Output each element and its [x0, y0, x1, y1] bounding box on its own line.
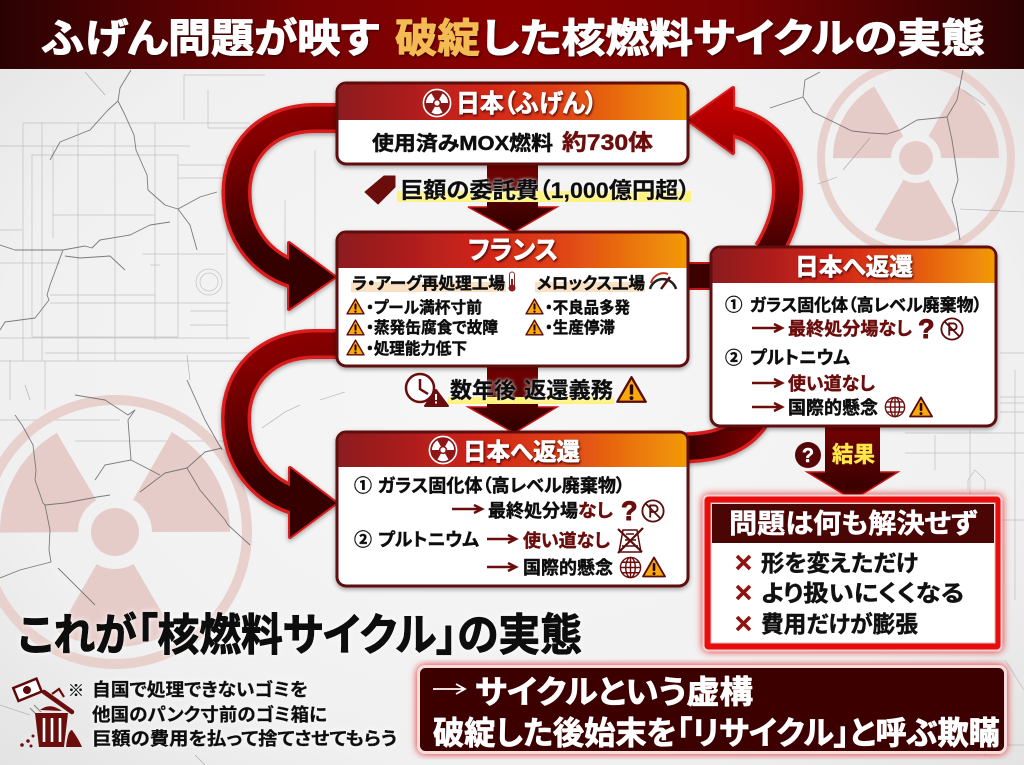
outcome items: 費用だけが膨張	[761, 611, 918, 637]
question mark: ?	[918, 314, 934, 344]
icon: money into trash	[13, 679, 82, 748]
concern text: 国際的懸念	[788, 398, 878, 418]
La Hague warnings: ・蒸発缶腐食で故障	[366, 318, 498, 337]
return duty text: 数年後	[450, 378, 516, 403]
radiation symbol: top right watermark	[821, 63, 1011, 253]
icon: no site	[642, 500, 664, 522]
title: 破綻	[395, 17, 480, 61]
panel: return to Japan (right): ガラス固化体（高レベル廃棄物）	[750, 295, 982, 315]
item 1: ①	[354, 476, 372, 496]
icon: globe	[620, 557, 641, 578]
arrow: down 2	[468, 362, 557, 433]
arrow: lower return link	[680, 418, 755, 448]
panel: return to Japan (centre): ガラス固化体（高レベル廃棄物）	[378, 476, 625, 496]
arrow: down 1	[468, 160, 557, 232]
radiation symbol: bottom left watermark	[0, 400, 247, 664]
arrow: no use	[752, 379, 782, 387]
icon: no site	[941, 318, 963, 340]
conclusion box	[418, 666, 1006, 752]
icon: warning	[910, 398, 932, 416]
panel: outcome	[704, 496, 1002, 650]
result label	[795, 442, 875, 468]
panel: return to Japan (right)	[711, 247, 996, 426]
icon: price tag	[365, 176, 395, 204]
Melox warnings: ・生産停滞	[545, 318, 615, 337]
note text: 自国で処理できないゴミを	[92, 679, 308, 700]
panel: France	[337, 232, 688, 366]
La Hague heading: ラ・アーグ再処理工場	[352, 273, 505, 293]
title	[42, 17, 985, 61]
panel: return to Japan (centre)	[337, 432, 688, 586]
icon: radiation	[423, 89, 451, 117]
Melox warnings	[526, 298, 630, 337]
icon: warning	[617, 377, 646, 402]
panel heading: 日本へ返還	[795, 254, 913, 281]
main heading: これが「核燃料サイクル」の実態	[18, 611, 582, 660]
no use text: 使い道なし	[788, 374, 875, 394]
outcome items: 形を変えただけ	[761, 550, 918, 576]
icon: clock	[406, 374, 448, 406]
concern text: 国際的懸念	[523, 558, 613, 578]
return duty label	[406, 374, 646, 406]
title: した核燃料サイクルの実態	[481, 17, 985, 61]
arrow: France to return	[236, 344, 340, 537]
disposal text: なし	[578, 501, 613, 521]
icon: radiation	[429, 436, 457, 464]
return duty label: 返還義務	[524, 378, 613, 403]
connector: France to right panel	[684, 263, 716, 289]
arrow: return to Japan	[688, 88, 788, 252]
panel heading: フランス	[468, 235, 558, 265]
arrow: disposal	[752, 324, 782, 332]
panel: return to Japan (right): プルトニウム	[750, 348, 851, 368]
count: 約730体	[562, 130, 653, 155]
question mark: ?	[621, 496, 638, 526]
panel: Japan Fugen	[337, 83, 688, 164]
conclusion arrow	[433, 684, 465, 694]
panel heading: 日本へ返還	[463, 439, 580, 466]
icon: globe	[885, 397, 905, 417]
note text: 巨額の費用を払って捨てさせてもらう	[92, 729, 397, 749]
icon: question: ?	[802, 445, 814, 467]
Melox heading: メロックス工場	[537, 274, 645, 293]
item 2: ②	[354, 530, 372, 550]
La Hague warnings	[347, 298, 498, 358]
note text: 他国のパンク寸前のゴミ箱に	[92, 704, 327, 725]
La Hague warnings: ・プール満杯寸前	[366, 298, 482, 317]
result text: 結果	[832, 442, 875, 467]
conclusion line 1: サイクルという虚構	[475, 674, 753, 710]
Melox warnings: ・不良品多発	[545, 298, 630, 317]
arrow: Japan to France	[236, 118, 340, 309]
outcome items: より扱いにくくなる	[761, 580, 964, 606]
icon: crossed out	[618, 528, 643, 553]
panel: return to Japan (centre): プルトニウム	[378, 530, 480, 550]
outcome items	[737, 550, 964, 637]
icon: gauge	[650, 273, 676, 289]
arrow: concern	[752, 403, 782, 411]
header bar	[0, 0, 1024, 69]
icon: warning	[643, 558, 665, 576]
arrow: down to result	[807, 422, 898, 500]
item 2: ②	[725, 348, 742, 368]
arrow: no use	[487, 535, 516, 543]
arrow: disposal	[452, 505, 482, 513]
fee text: 巨額の委託費（1,000億円超）	[400, 178, 690, 203]
title: ふげん問題が映す	[42, 17, 379, 61]
no use text: 使い道なし	[523, 531, 610, 551]
La Hague warnings: ・処理能力低下	[366, 339, 467, 358]
fee label	[365, 176, 691, 204]
outcome heading: 問題は何も解決せず	[729, 509, 977, 539]
item 1: ①	[725, 295, 742, 315]
panel heading: 日本（ふげん）	[456, 90, 597, 118]
note text	[68, 679, 397, 749]
conclusion line 2: 破綻した後始末を「リサイクル」と呼ぶ欺瞞	[433, 715, 1000, 751]
fuel text: 使用済みMOX燃料	[372, 132, 553, 155]
note text: ※	[68, 683, 84, 700]
icon: thermometer	[508, 272, 516, 292]
disposal text: 最終処分場	[488, 501, 578, 521]
arrow: concern	[487, 563, 516, 571]
disposal text: 最終処分場なし	[788, 319, 912, 339]
